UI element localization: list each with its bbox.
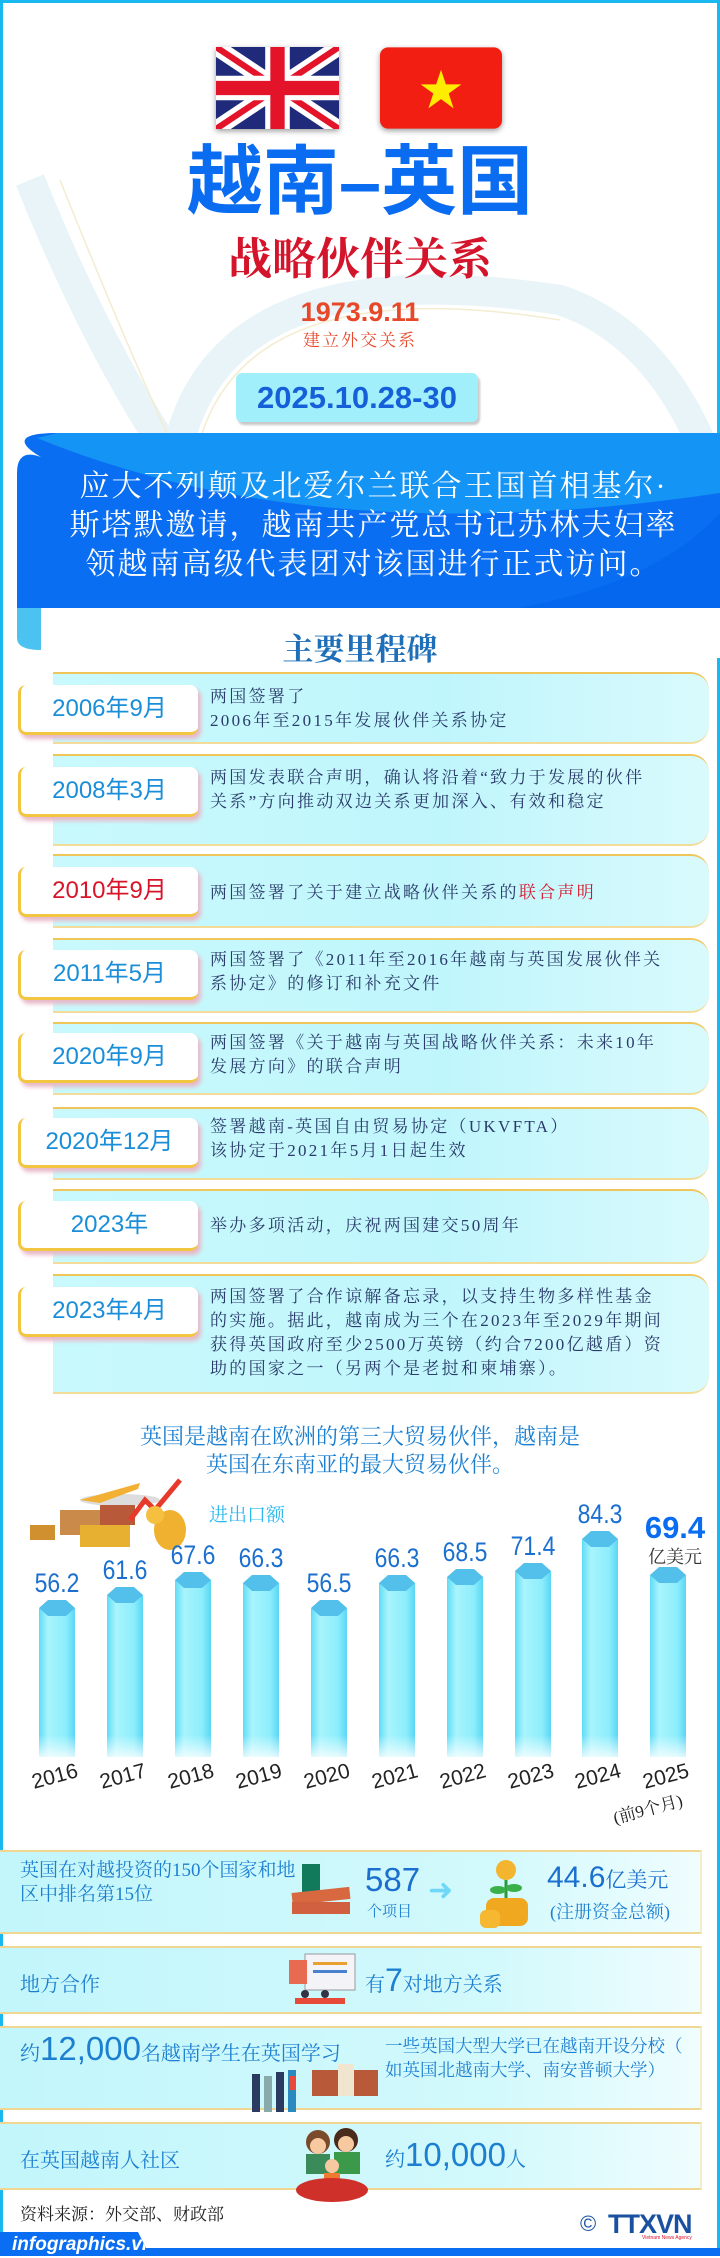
info box: local cooperation: 地方合作: [20, 1974, 100, 1996]
milestone rows: 两国发表联合声明，确认将沿着“致力于发展的伙伴: [210, 768, 644, 787]
year labels: 2025: [640, 1759, 691, 1794]
milestone rows: 系协定》的修订和补充文件: [210, 974, 442, 993]
year labels: (前9个月): [611, 1791, 685, 1828]
trade heading: 英国是越南在欧洲的第三大贸易伙伴，越南是: [140, 1424, 580, 1449]
trade heading: [140, 1424, 580, 1477]
year labels: 2018: [165, 1759, 216, 1794]
icon: family: [296, 2128, 368, 2202]
source: 资料来源：外交部、财政部: [20, 2205, 224, 2224]
bar values: 61.6: [103, 1555, 147, 1585]
milestone rows: 2020年12月: [45, 1128, 174, 1155]
year labels: 2019: [233, 1759, 284, 1794]
milestone rows: 两国签署了: [210, 687, 306, 706]
bar values: 68.5: [443, 1537, 487, 1567]
milestone rows: 助的国家之一（另两个是老挝和柬埔寨）。: [210, 1359, 568, 1378]
bar values: 71.4: [511, 1531, 555, 1561]
visit date box: [236, 373, 478, 422]
info box: investment: 个项目: [367, 1904, 412, 1920]
bar values: 67.6: [171, 1540, 215, 1570]
bar values: 亿美元: [648, 1547, 702, 1567]
year labels: 2017: [97, 1759, 148, 1794]
milestone rows: 2023年4月: [52, 1297, 167, 1324]
milestone rows: 2006年9月: [52, 695, 167, 722]
visit date box: 2025.10.28-30: [257, 380, 457, 415]
year labels: 2016: [29, 1759, 80, 1794]
milestone rows: 签署越南-英国自由贸易协定（UKVFTA）: [210, 1117, 570, 1136]
milestone rows: 2020年9月: [52, 1043, 167, 1070]
milestone rows: [18, 672, 709, 1394]
milestone 2010: [53, 854, 709, 928]
milestone rows: 两国签署了合作谅解备忘录，以支持生物多样性基金: [210, 1287, 654, 1306]
logo TTXVN: [580, 2209, 692, 2241]
milestone rows: 2006年至2015年发展伙伴关系协定: [210, 711, 509, 730]
milestone 2023-4: [53, 1274, 709, 1394]
logo TTXVN: Vietnam News Agency: [642, 2235, 692, 2241]
milestone rows: 的实施。据此，越南成为三个在2023年至2029年期间: [210, 1311, 663, 1330]
icon: students & university: [252, 2064, 378, 2112]
milestone 2008: [53, 754, 709, 846]
milestone rows: 该协定于2021年5月1日起生效: [210, 1141, 468, 1160]
milestone rows: 举办多项活动，庆祝两国建交50周年: [210, 1216, 521, 1235]
date established: [301, 297, 419, 350]
bar values: 56.5: [307, 1568, 351, 1598]
info box: investment: [0, 1850, 702, 1934]
milestone rows: 发展方向》的联合声明: [210, 1057, 403, 1076]
milestone 2020-9: [53, 1022, 709, 1095]
date established: 建立外交关系: [303, 331, 417, 350]
bar values: 66.3: [239, 1543, 283, 1573]
info box: students: 如英国北越南大学、南安普顿大学）: [385, 2060, 665, 2080]
blue banner: [17, 433, 720, 650]
info box: students: [0, 2026, 702, 2110]
footer tab: infographics.vn: infographics.vn: [12, 2234, 153, 2255]
milestone rows: 2008年3月: [52, 777, 167, 804]
milestone rows: 两国签署了关于建立战略伙伴关系的联合声明: [210, 883, 596, 902]
banner text: 斯塔默邀请，越南共产党总书记苏林夫妇率: [70, 509, 678, 542]
info box: local cooperation: [0, 1946, 702, 2014]
info box: local cooperation: 有7对地方关系: [365, 1962, 503, 1998]
subtitle: 战略伙伴关系: [228, 235, 492, 284]
title: 越南–英国: [187, 140, 533, 225]
logo TTXVN: ©: [580, 2211, 596, 2236]
info box: community: [0, 2122, 702, 2190]
info box: investment: 44.6亿美元: [547, 1861, 668, 1894]
bar values: 56.2: [35, 1568, 79, 1598]
banner text: 领越南高级代表团对该国进行正式访问。: [86, 548, 662, 581]
icon: books: [292, 1864, 350, 1914]
arrow: ➜: [428, 1874, 453, 1907]
banner text: 应大不列颠及北爱尔兰联合王国首相基尔·: [80, 470, 668, 503]
info box: investment: 587: [365, 1861, 420, 1898]
milestone 2023: [53, 1189, 709, 1264]
milestone 2006: [53, 672, 709, 744]
icon: coins plant: [480, 1860, 528, 1928]
milestone rows: 关系”方向推动双边关系更加深入、有效和稳定: [210, 792, 606, 811]
trade heading: 英国在东南亚的最大贸易伙伴。: [206, 1452, 514, 1477]
milestone 2011: [53, 938, 709, 1013]
bar values: 66.3: [375, 1543, 419, 1573]
info box: community: 约10,000人: [385, 2136, 526, 2173]
footer bar: [0, 2248, 720, 2256]
year labels: 2023: [505, 1759, 556, 1794]
flag: UK: [212, 45, 343, 135]
milestone rows: 获得英国政府至少2500万英镑（约合7200亿越盾）资: [210, 1335, 663, 1354]
logo TTXVN: TTXVN: [608, 2209, 692, 2239]
milestone rows: 两国签署了《2011年至2016年越南与英国发展伙伴关: [210, 950, 662, 969]
milestones heading: 主要里程碑: [282, 632, 438, 667]
white panel: [41, 608, 720, 658]
decorative swirl background: [16, 174, 713, 433]
banner text: [70, 470, 678, 581]
flag: Vietnam: [376, 46, 506, 134]
milestone 2020-12: [53, 1107, 709, 1180]
icon: meeting: [289, 1954, 356, 2004]
info box: students: 约12,000名越南学生在英国学习: [20, 2030, 341, 2067]
year labels: 2024: [572, 1759, 623, 1794]
info box: investment: 英国在对越投资的150个国家和地区中排名第15位: [20, 1860, 296, 1905]
year labels: 2020: [301, 1759, 352, 1794]
milestone rows: 两国签署《关于越南与英国战略伙伴关系：未来10年: [210, 1033, 656, 1052]
year labels: 2021: [369, 1759, 420, 1794]
icon: trade logistics: [30, 1478, 186, 1550]
bar values: 69.4: [645, 1510, 705, 1545]
milestone rows: 2010年9月: [52, 877, 167, 904]
bar values: [35, 1499, 705, 1598]
year labels: 2022: [437, 1759, 488, 1794]
milestone rows: 2011年5月: [53, 960, 166, 987]
bar values: 84.3: [578, 1499, 622, 1529]
chart label: 进出口额: [209, 1505, 285, 1526]
info box: investment: (注册资金总额): [550, 1902, 670, 1922]
info box: students: 一些英国大型大学已在越南开设分校（: [385, 2036, 682, 2056]
date established: 1973.9.11: [301, 297, 419, 327]
info box: community: 在英国越南人社区: [20, 2150, 180, 2172]
milestone rows: 2023年: [71, 1211, 148, 1238]
